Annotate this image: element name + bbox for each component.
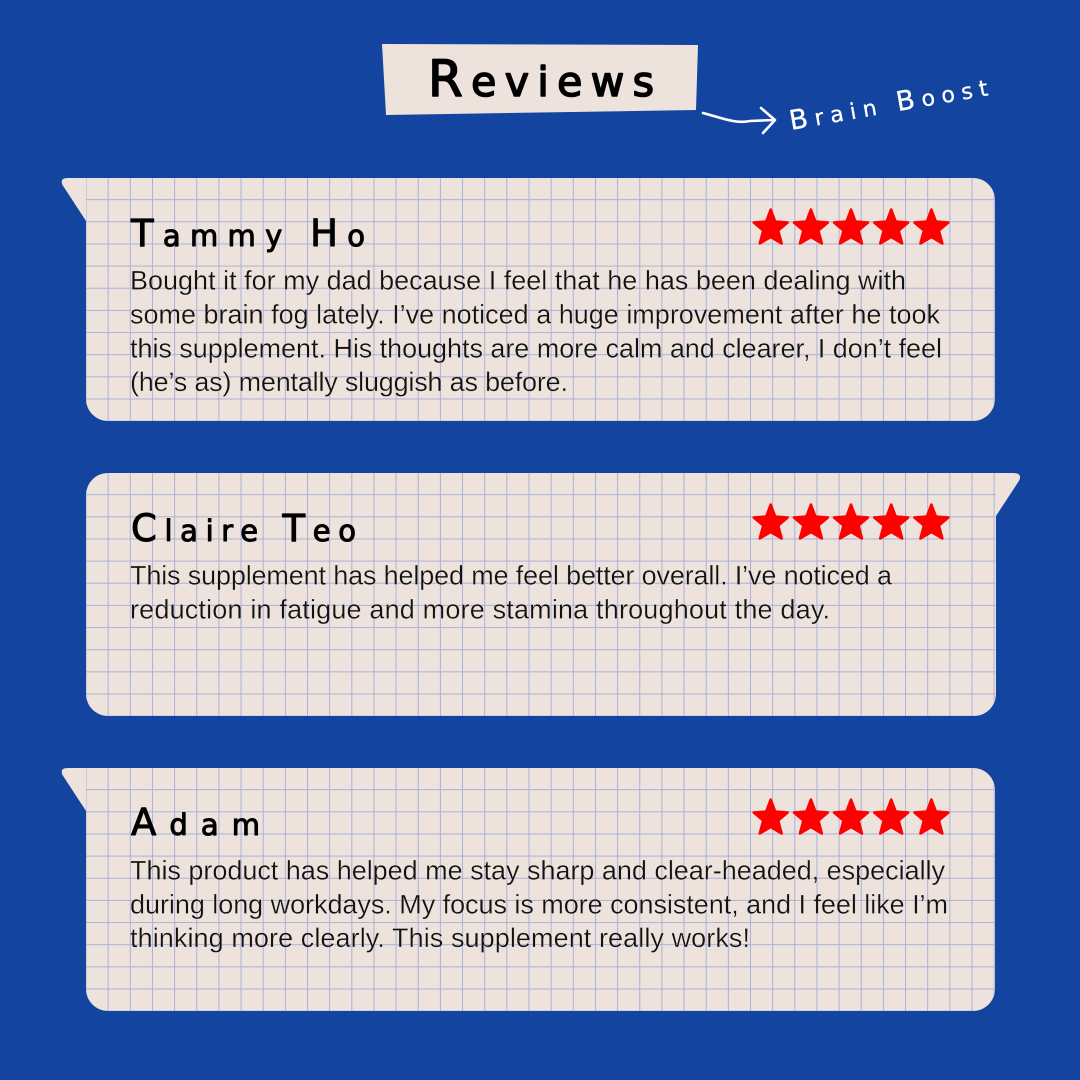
reviewer name: T ammy H o	[130, 212, 365, 255]
review text: This product has helped me stay sharp and clear-headed, especially	[130, 856, 946, 886]
speech bubble	[62, 768, 995, 1011]
review text: some brain fog lately. I’ve noticed a huge improvement after he took	[130, 300, 940, 330]
title label paper	[382, 44, 698, 115]
review text: reduction in fatigue and more stamina throughout the day.	[130, 594, 830, 624]
star rating	[754, 504, 948, 538]
review text: Bought it for my dad because I feel that he has been dealing with	[130, 266, 906, 296]
brand note: Brain Boost	[787, 71, 991, 137]
review text: thinking more clearly. This supplement really works!	[130, 923, 750, 953]
speech bubble	[86, 473, 1020, 716]
review text	[130, 266, 942, 397]
review text: during long workdays. My focus is more consistent, and I feel like I’m	[130, 890, 948, 920]
panel: Claire Teo review	[86, 473, 1020, 716]
speech bubble	[62, 178, 995, 421]
star rating	[754, 800, 948, 834]
arrow	[703, 108, 775, 133]
reviewer name: C laire T eo	[131, 507, 356, 550]
panel: Tammy Ho review	[62, 178, 995, 421]
review text	[130, 856, 948, 953]
star rating	[754, 210, 948, 244]
review text: (he’s as) mentally sluggish as before.	[130, 367, 568, 397]
review text	[130, 560, 893, 624]
panel: Adam review	[62, 768, 995, 1011]
reviewer name: A dam	[131, 801, 260, 844]
review text: this supplement. His thoughts are more calm and clearer, I don’t feel	[130, 334, 942, 364]
title text: Reviews	[428, 50, 654, 108]
review text: This supplement has helped me feel better overall. I’ve noticed a	[130, 560, 893, 590]
title	[382, 44, 698, 115]
